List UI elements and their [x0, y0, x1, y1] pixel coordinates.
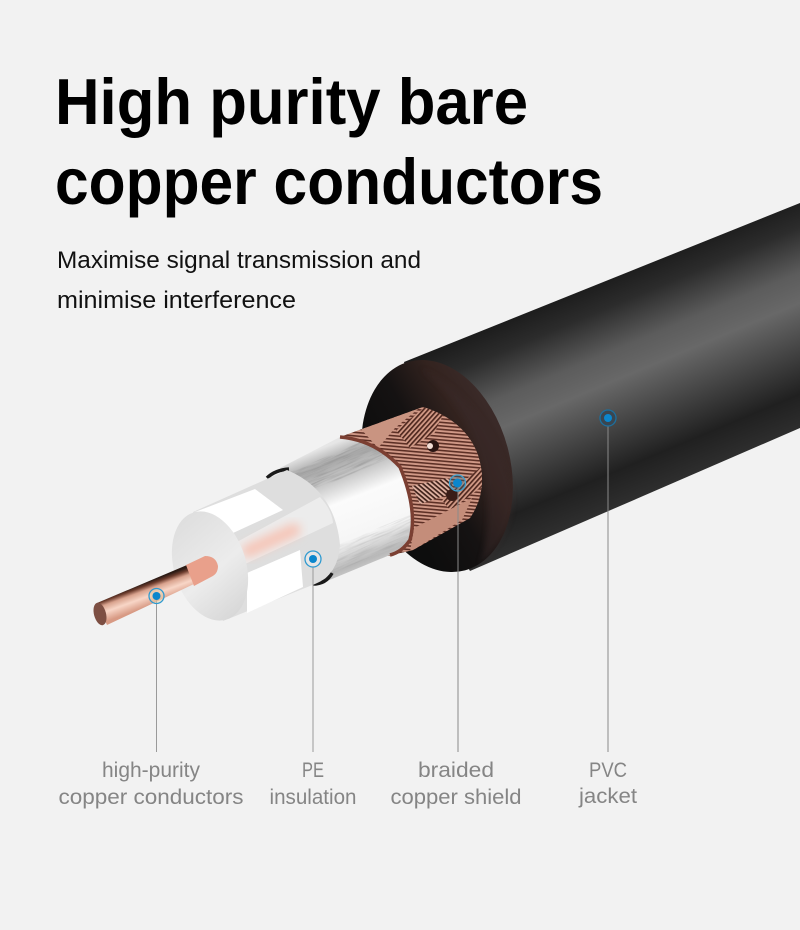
- label: high-purity copper conductors: [58, 759, 244, 809]
- copper conductor wire: [91, 556, 218, 627]
- label: high-purity copper conductors: copper conductors: [58, 786, 244, 809]
- label: braided copper shield: [390, 759, 522, 809]
- label: braided copper shield: copper shield: [390, 786, 522, 809]
- label: PVC jacket: [578, 759, 637, 808]
- label: braided copper shield: braided: [418, 759, 494, 782]
- title: copper conductors: [55, 145, 603, 218]
- title: High purity bare: [55, 65, 528, 138]
- subtitle: minimise interference: [57, 287, 296, 314]
- PVC jacket: [339, 203, 800, 589]
- label: PVC jacket: PVC: [589, 759, 627, 782]
- callout: PE: [305, 551, 321, 752]
- PE insulation: [159, 469, 340, 630]
- braided copper shield: [343, 407, 482, 556]
- label: PE insulation: PE: [302, 759, 324, 782]
- subtitle: [57, 247, 421, 314]
- callout: jacket: [600, 410, 616, 752]
- title: [55, 65, 603, 218]
- label: PE insulation: insulation: [270, 786, 356, 809]
- label: PE insulation: [270, 759, 356, 809]
- callout: conductor: [149, 588, 164, 752]
- label: PVC jacket: jacket: [578, 785, 637, 808]
- silver foil layer: [280, 435, 414, 586]
- subtitle: Maximise signal transmission and: [57, 247, 421, 274]
- label: high-purity copper conductors: high-purity: [102, 759, 200, 782]
- cable illustration: [91, 203, 800, 630]
- callout: shield: [450, 475, 466, 752]
